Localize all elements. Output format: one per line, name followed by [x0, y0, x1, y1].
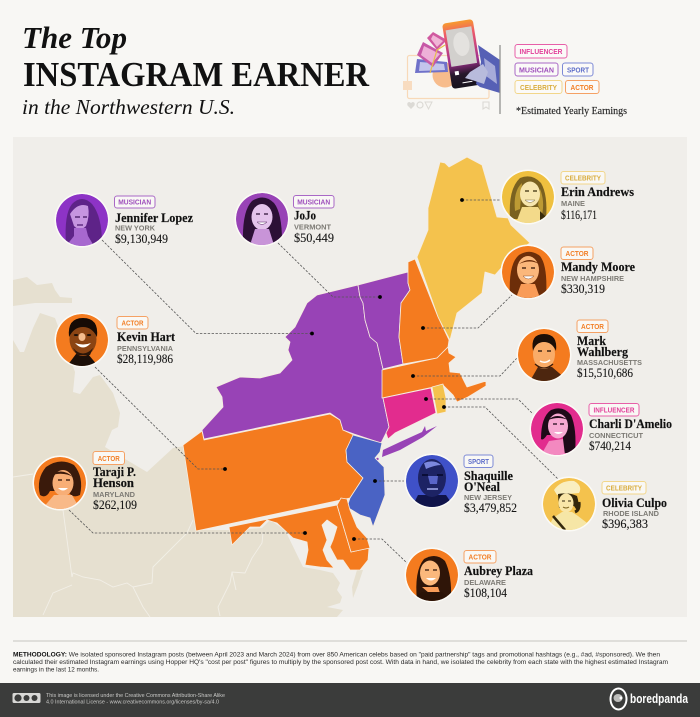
- name: [93, 465, 136, 490]
- name: Henson: [93, 476, 134, 490]
- name: Kevin Hart: [117, 330, 176, 344]
- portrait: Mark Wahlberg: [516, 328, 572, 382]
- license text: This image is licensed under the Creative Commons Attribution-Share Alike: [46, 693, 225, 699]
- state: New York: [202, 285, 389, 443]
- earnings: $108,104: [464, 586, 508, 600]
- name: Erin Andrews: [561, 185, 634, 199]
- card: Mark Wahlberg: [516, 320, 642, 382]
- name: Mandy Moore: [561, 260, 635, 274]
- tag: CELEBRITY: [606, 486, 642, 492]
- footer bar: [0, 683, 700, 717]
- portrait: Aubrey Plaza: [404, 548, 460, 602]
- title line 2: INSTAGRAM EARNER: [23, 55, 370, 94]
- tag: ACTOR: [468, 554, 492, 562]
- name: [464, 469, 513, 494]
- earnings: $740,214: [589, 439, 632, 453]
- name: [577, 334, 629, 359]
- portrait: Charli D'Amelio: [530, 402, 584, 456]
- state: Massachusetts: [382, 347, 486, 402]
- illustration: phone with money: [403, 19, 500, 98]
- tag: INFLUENCER: [594, 408, 634, 414]
- name: O'Neal: [464, 480, 500, 494]
- card: Jennifer Lopez: [54, 192, 193, 248]
- tag: SPORT: [468, 459, 490, 466]
- name: Jennifer Lopez: [115, 211, 193, 225]
- state: New York, Staten Island: [376, 458, 379, 460]
- state: MAINE: [561, 199, 585, 208]
- footer divider: [13, 640, 687, 642]
- logo: boredpanda: boredpanda: [630, 692, 689, 706]
- earnings: $15,510,686: [577, 366, 633, 380]
- state: NEW YORK: [115, 224, 156, 232]
- earnings: $396,383: [602, 517, 648, 531]
- state: Vermont: [358, 272, 410, 369]
- state: RHODE ISLAND: [603, 509, 660, 518]
- state: MASSACHUSETTS: [577, 358, 642, 367]
- state: CONNECTICUT: [589, 431, 643, 440]
- state: New Hampshire: [399, 259, 449, 364]
- name: Shaquille: [464, 469, 513, 483]
- name: Taraji P.: [93, 465, 136, 479]
- card: Kevin Hart: [54, 312, 176, 368]
- earnings: $28,119,986: [117, 352, 173, 366]
- title line 3: in the Northwestern U.S.: [22, 95, 235, 119]
- state: Pennsylvania: [183, 414, 363, 531]
- earnings: $116,171: [561, 208, 597, 222]
- legend tag: celebrity: CELEBRITY: [520, 85, 557, 92]
- leader lines: [69, 198, 558, 563]
- state: DELAWARE: [464, 578, 506, 587]
- card: Erin Andrews: [500, 170, 634, 224]
- state: New Jersey: [346, 435, 385, 527]
- tag: [589, 404, 639, 416]
- map: northeastern states: [183, 157, 530, 570]
- license text: [46, 693, 225, 706]
- icon: creative commons badge: [12, 693, 40, 703]
- legend: [515, 44, 627, 117]
- card: Shaquille O'Neal: [404, 454, 517, 515]
- neighbouring land: [13, 277, 363, 617]
- state: New York, Long Island: [382, 426, 437, 457]
- name: Charli D'Amelio: [589, 417, 672, 431]
- earnings: $50,449: [294, 231, 334, 245]
- legend tag: actor: ACTOR: [570, 85, 594, 92]
- legend tag: musician: MUSICIAN: [519, 68, 554, 74]
- methodology: [13, 652, 668, 674]
- name: Wahlberg: [577, 345, 629, 359]
- state: MARYLAND: [93, 490, 136, 499]
- methodology: calculated their estimated Instagram earnings using Hopper HQ's "cost per post" figures to multiply by the sponsored post cost. With data in hand, we isolated the celebrity from each state with the highest estimated Instagram: [13, 659, 668, 666]
- state: Connecticut: [383, 388, 436, 439]
- card: Aubrey Plaza: [404, 548, 534, 602]
- card: Taraji P. Henson: [32, 452, 137, 512]
- legend note: *Estimated Yearly Earnings: [516, 105, 627, 117]
- name: Aubrey Plaza: [464, 564, 534, 578]
- state: NEW HAMPSHIRE: [561, 274, 624, 283]
- tag: ACTOR: [566, 251, 588, 258]
- legend tag: influencer: INFLUENCER: [520, 49, 562, 56]
- legend divider: [499, 45, 501, 114]
- legend tag: sport: SPORT: [567, 68, 590, 74]
- tag: MUSICIAN: [118, 200, 151, 207]
- title line 1: The Top: [22, 20, 127, 55]
- card: Olivia Culpo: [542, 476, 667, 532]
- tag: ACTOR: [98, 456, 120, 463]
- state: PENNSYLVANIA: [117, 344, 174, 353]
- tag: CELEBRITY: [565, 176, 601, 182]
- panel: map background: [13, 137, 687, 617]
- tag: MUSICIAN: [297, 200, 330, 206]
- methodology: METHODOLOGY: We isolated sponsored Instagram posts (between April 2023 and March 2024) from over 850 American celebs based on "paid partnership" tags and promotional hashtags (e.g., #ad, #sponsored). We then: [13, 652, 660, 658]
- card: Charli D'Amelio: [530, 402, 672, 456]
- state: Rhode Island: [432, 384, 446, 414]
- earnings: $9,130,949: [115, 232, 168, 246]
- icons: post actions: [407, 102, 489, 109]
- state: Maryland: [229, 505, 369, 570]
- tag: ACTOR: [581, 324, 604, 331]
- title: [22, 20, 370, 119]
- state: VERMONT: [294, 222, 331, 232]
- tag: ACTOR: [122, 320, 144, 328]
- state: Delaware: [337, 498, 370, 552]
- portrait: JoJo: [234, 192, 290, 246]
- portrait: Olivia Culpo: [542, 476, 596, 532]
- state: NEW JERSEY: [464, 493, 512, 502]
- methodology: earnings in the last 12 months.: [13, 666, 99, 674]
- portrait: Shaquille O'Neal: [404, 454, 460, 508]
- logo: boredpanda: [610, 688, 689, 710]
- earnings: $330,319: [561, 282, 605, 296]
- portrait: Kevin Hart: [54, 312, 110, 368]
- state: Maine: [417, 157, 530, 340]
- license text: 4.0 International License - www.creativecommons.org/licenses/by-sa/4.0: [46, 700, 219, 706]
- portrait: Mandy Moore: [500, 244, 556, 300]
- name: Olivia Culpo: [602, 496, 667, 510]
- earnings: $3,479,852: [464, 501, 517, 515]
- earnings: $262,109: [93, 498, 137, 512]
- portrait: Jennifer Lopez: [54, 192, 110, 248]
- card: JoJo: [234, 192, 334, 246]
- portrait: Erin Andrews: [500, 170, 556, 224]
- card: Mandy Moore: [500, 244, 635, 300]
- portrait: Taraji P. Henson: [32, 456, 88, 510]
- name: Mark: [577, 334, 607, 348]
- name: JoJo: [294, 208, 316, 222]
